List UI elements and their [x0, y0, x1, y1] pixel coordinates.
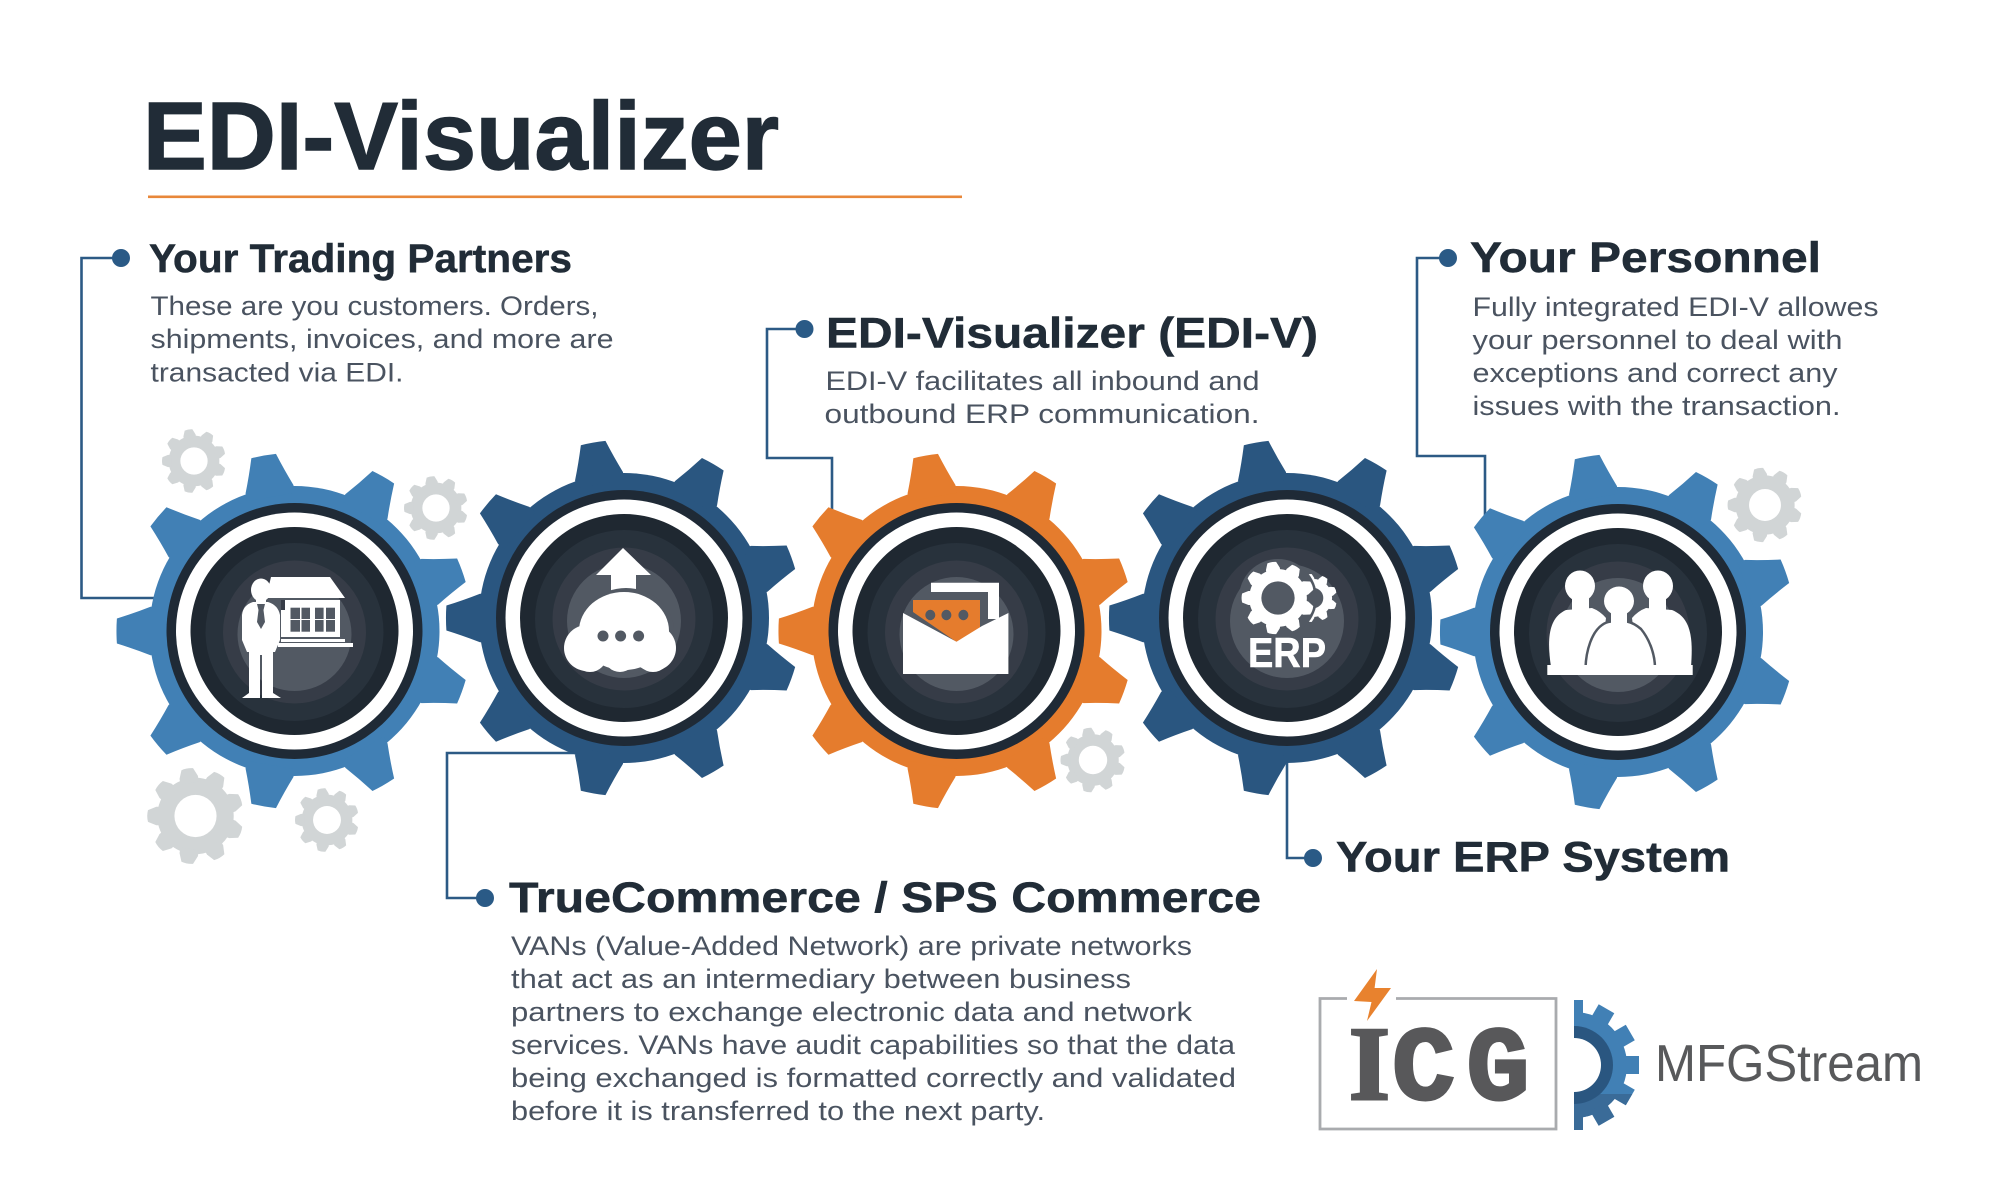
gear 3: EDI-V: [778, 451, 1132, 811]
icon: lightning bolt: [1354, 969, 1391, 1021]
text block: TrueCommerce / SPS Commerce: [509, 874, 1261, 1126]
gear 2: VAN cloud: [446, 438, 800, 798]
description: partners to exchange electronic data and network: [511, 997, 1193, 1027]
heading: TrueCommerce / SPS Commerce: [509, 874, 1261, 922]
logo: ICG: [1320, 969, 1556, 1131]
gear 5: personnel: [1440, 452, 1794, 812]
heading: Your Personnel: [1470, 234, 1821, 282]
heading: Your Trading Partners: [149, 237, 572, 281]
description: being exchanged is formatted correctly and validated: [511, 1063, 1236, 1093]
icon: envelope: [903, 583, 1008, 674]
connector: Your ERP System: [1287, 750, 1322, 867]
connector: Your Trading Partners: [82, 249, 165, 598]
description: outbound ERP communication.: [824, 399, 1260, 429]
title underline: [148, 196, 962, 198]
icon: half gear: [1574, 1000, 1639, 1130]
text block: Your Personnel: [1470, 234, 1878, 421]
description: services. VANs have audit capabilities so that the data: [511, 1030, 1236, 1060]
description: that act as an intermediary between business: [511, 964, 1131, 994]
small grey gears: [147, 428, 1803, 865]
description: Fully integrated EDI-V allowes: [1472, 292, 1878, 322]
icon: cloud with arrow: [564, 548, 676, 674]
text block: EDI-Visualizer (EDI-V): [824, 310, 1318, 429]
description: VANs (Value-Added Network) are private networks: [511, 931, 1192, 961]
icon: three people: [1547, 570, 1693, 675]
connector: EDI-Visualizer: [767, 320, 832, 520]
heading: EDI-Visualizer (EDI-V): [826, 310, 1318, 358]
gear 4: ERP: [1109, 438, 1463, 798]
text block: Your Trading Partners: [149, 237, 614, 388]
title: EDI-Visualizer: [143, 83, 779, 190]
description: issues with the transaction.: [1472, 391, 1840, 421]
description: exceptions and correct any: [1472, 358, 1838, 388]
description: EDI-V facilitates all inbound and: [826, 366, 1260, 396]
logo: MFGStream: [1574, 1000, 1920, 1130]
connector: Your Personnel: [1417, 249, 1485, 530]
logo: ICG: CG: [1392, 1012, 1530, 1131]
icon: ERP gears: [1239, 559, 1337, 676]
description: [511, 931, 1236, 1126]
logo: ICG: I: [1349, 1005, 1390, 1122]
description: shipments, invoices, and more are: [150, 324, 614, 354]
description: [1472, 292, 1878, 421]
description: [824, 366, 1260, 429]
logo: MFGStream: MFGStream: [1655, 1035, 1923, 1093]
connector: TrueCommerce: [447, 753, 590, 907]
description: your personnel to deal with: [1472, 325, 1842, 355]
text block: Your ERP System: Your ERP System: [1336, 834, 1730, 882]
icon: businessman and building: [242, 577, 353, 698]
description: transacted via EDI.: [150, 358, 404, 388]
description: These are you customers. Orders,: [150, 291, 598, 321]
description: before it is transferred to the next party.: [511, 1096, 1045, 1126]
gear 1: trading partners: [116, 451, 470, 811]
description: [150, 291, 614, 388]
icon: ERP gears: ERP: [1248, 629, 1326, 676]
